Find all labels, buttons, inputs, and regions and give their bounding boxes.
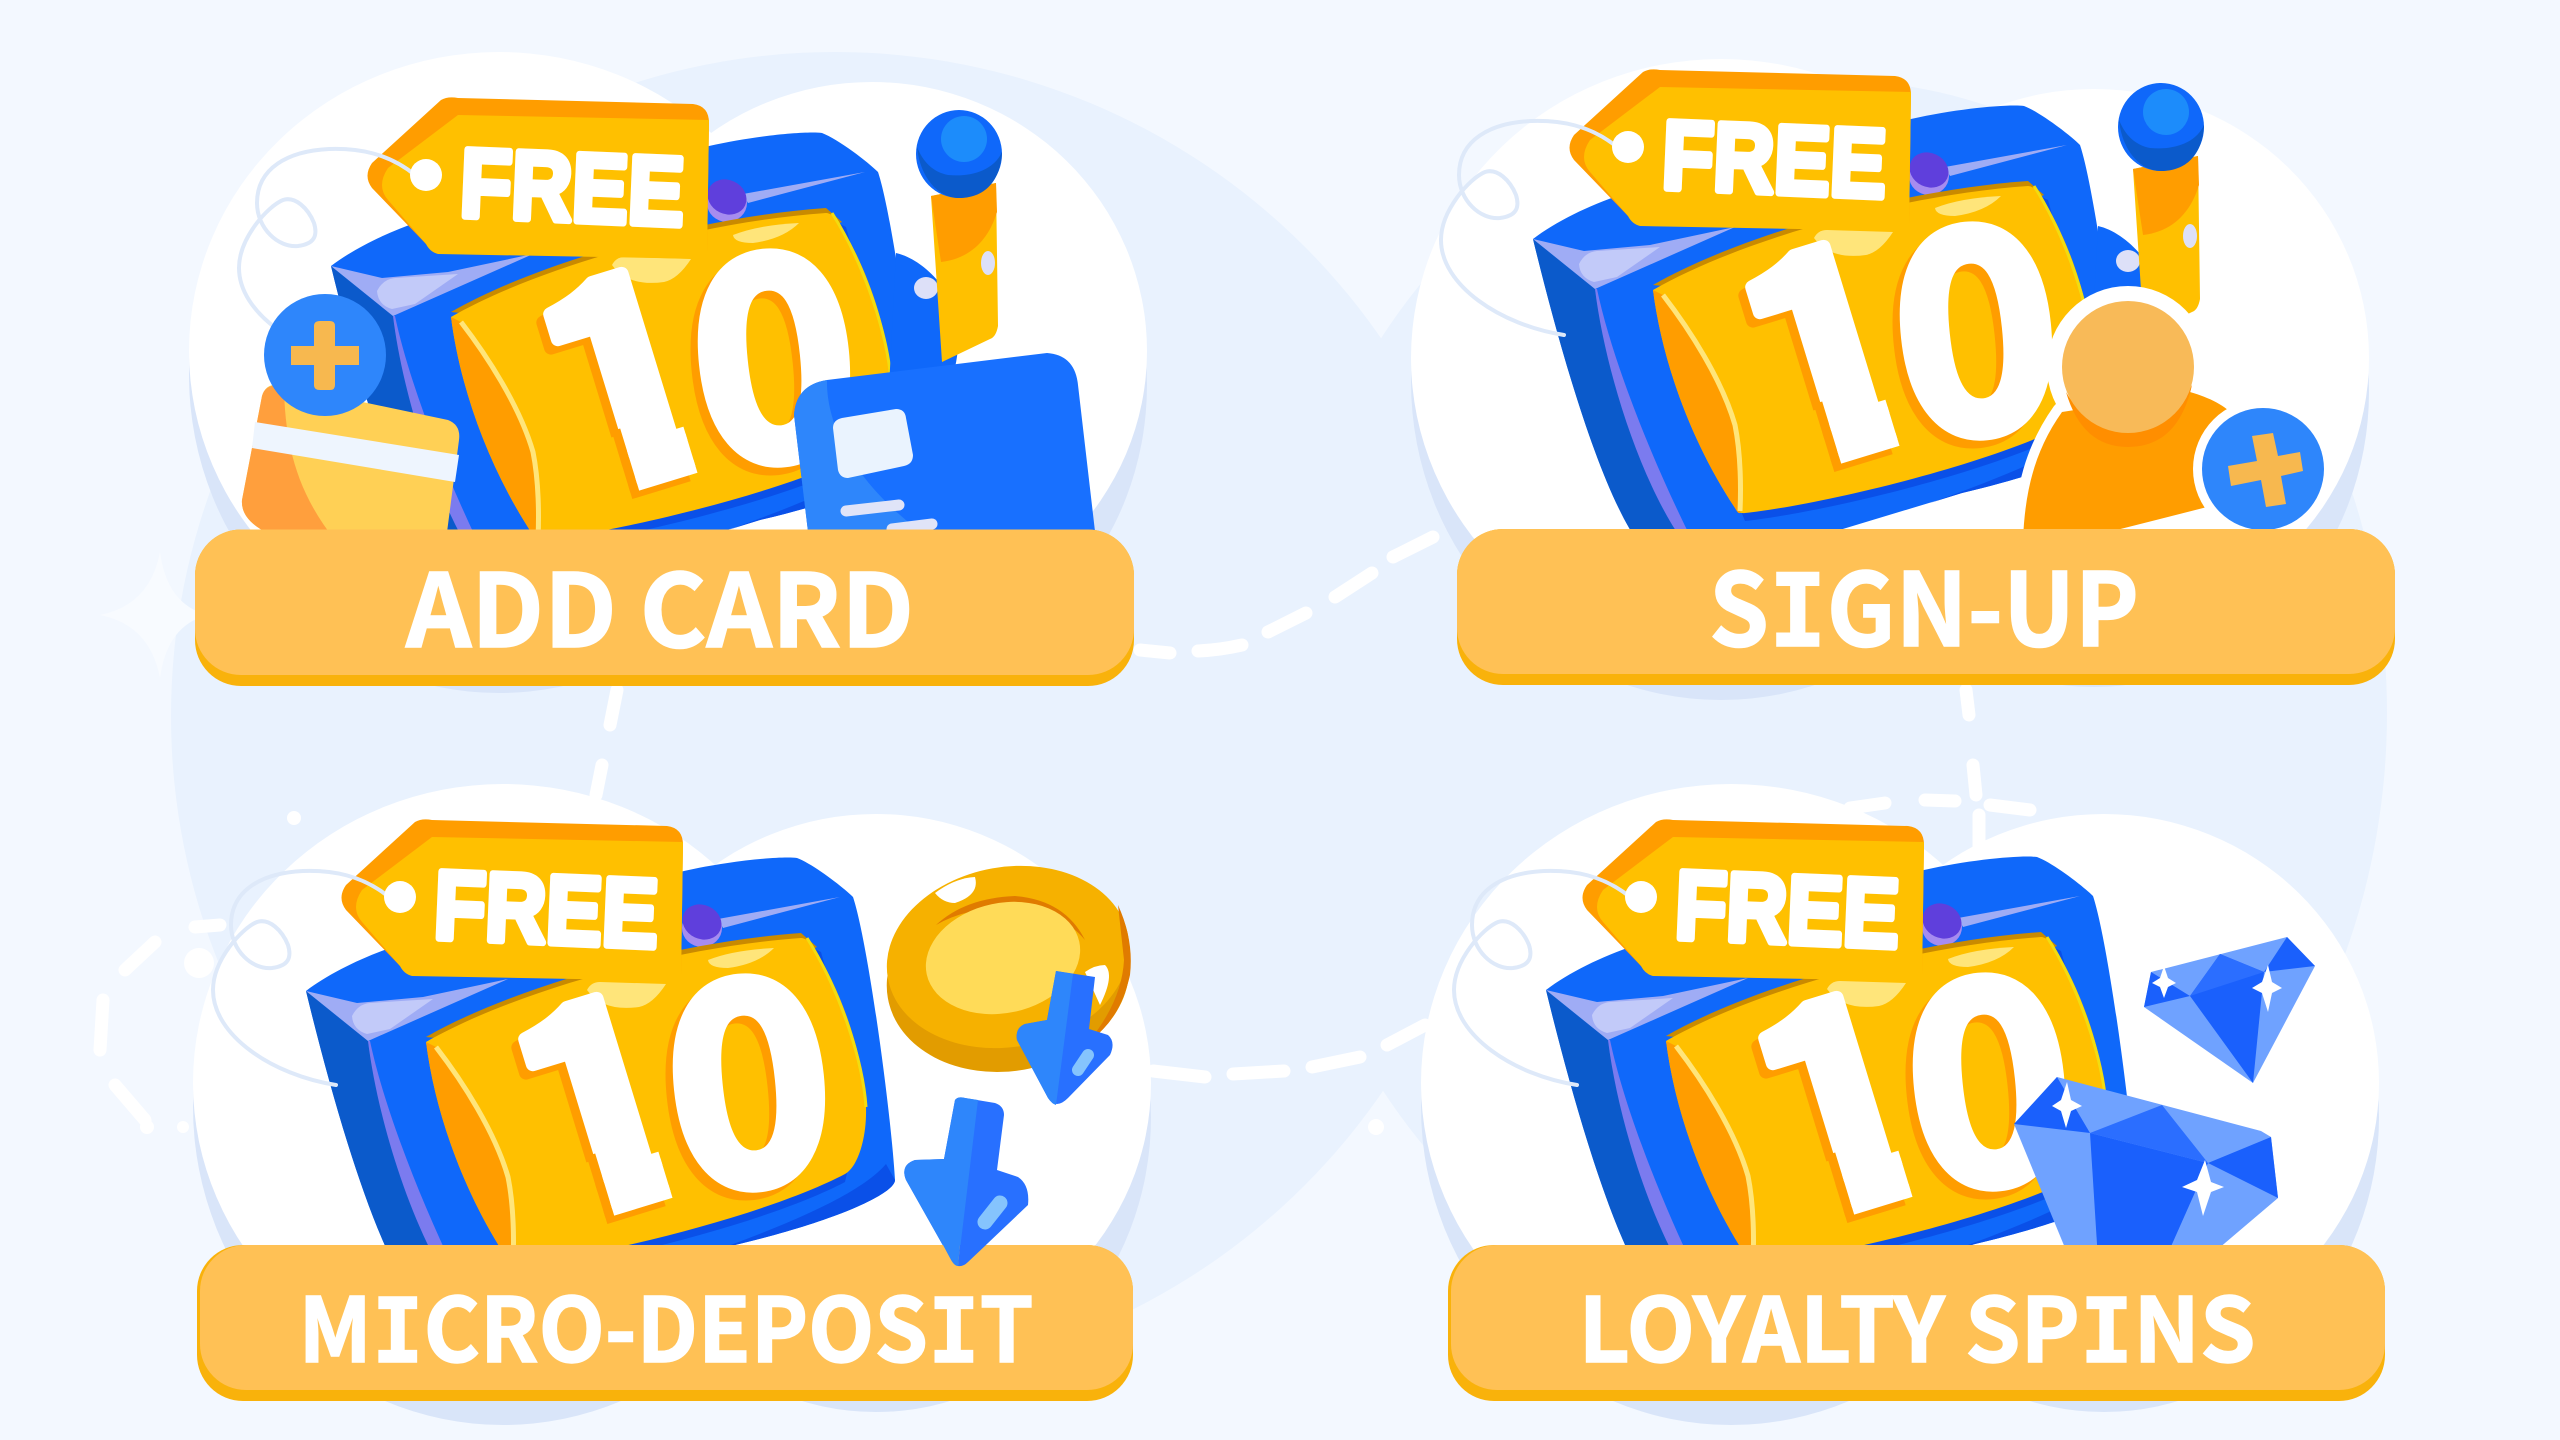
icon: big arrow tip [943,1245,986,1266]
icon: plus badge [264,294,386,416]
free tag [1441,69,1911,335]
slot machine [1533,83,2204,563]
slot machine: 0 [643,852,850,1273]
slot machine: 1 [1694,862,1976,1306]
sparkle [100,552,208,678]
slot machine: 1 [454,863,736,1307]
slot machine: 1 [1688,870,1969,1314]
label: sign-up: SIGN-UP [1709,530,2139,676]
slot machine: 0 [1883,851,2090,1272]
slot machine: 0 [1870,100,2077,521]
connecting dashes [100,537,2030,1120]
free tag: FREE [1660,100,1888,218]
label: sign-up [1457,529,2395,685]
label: add card: ADD CARD [405,531,914,677]
slot machine: 0 [661,134,868,555]
free tag: FREE [458,128,686,246]
icon: big diamond [2014,1077,2278,1260]
slot machine: 0 [1876,858,2083,1279]
slot machine: 0 [1863,107,2070,528]
icon: small arrow [1017,971,1113,1105]
slot machine [306,858,895,1245]
icon: plus badge [2193,399,2333,539]
label: add card [195,530,1134,686]
backdrop circles [1421,784,2379,1425]
free tag: FREE [1673,850,1901,968]
free tag [239,97,709,363]
icon: big arrow [904,1097,1028,1266]
slot machine: 1 [1675,119,1956,563]
free tag: FREE [432,850,660,968]
panel: micro-deposit [193,784,1151,1425]
icon: person [2023,286,2236,540]
backdrop circles [189,52,1147,693]
free tag [1454,819,1924,1085]
slot machine: 0 [636,859,843,1280]
decorative dots [140,811,1384,1135]
icon: blue card [794,353,1096,540]
background blob [171,52,2387,1380]
slot machine: 1 [479,138,761,582]
panel: loyalty spins [1421,784,2385,1425]
label: micro-deposit: MICRO-DEPOSIT [298,1259,1033,1388]
backdrop circles [1411,59,2369,700]
icon: coin [872,847,1144,1091]
slot machine: 0 [668,127,875,548]
label: loyalty spins [1448,1245,2385,1401]
slot machine: 1 [473,146,754,590]
slot machine [331,110,1002,530]
panel: sign-up [1411,59,2395,700]
icon: orange card [242,384,459,540]
panel: add card [189,52,1147,693]
label: micro-deposit [197,1245,1133,1401]
free tag [213,819,683,1085]
slot machine: 1 [1681,111,1963,555]
slot machine: 1 [448,871,729,1315]
icon: small diamond [2144,937,2315,1083]
label: loyalty spins: LOYALTY SPINS [1578,1259,2256,1388]
slot machine [1546,856,2127,1245]
backdrop circles [193,784,1151,1425]
